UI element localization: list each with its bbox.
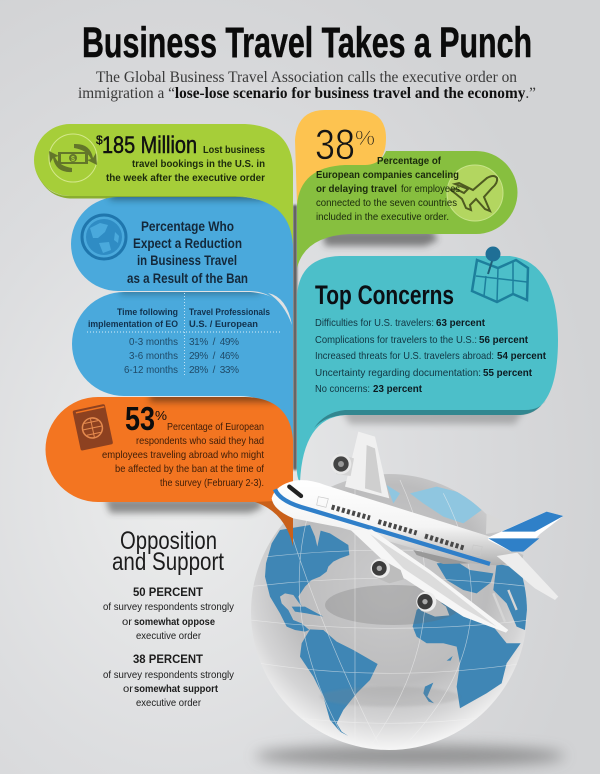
table header — [88, 307, 270, 330]
subtitle: The Global Business Travel Association calls the executive order on — [96, 69, 517, 86]
concerns list — [315, 317, 546, 395]
panel: percentage who expect a reduction — [71, 190, 293, 335]
airplane — [272, 432, 563, 633]
heading: as a Result of the Ban — [127, 271, 248, 286]
text: 53 percent description: Percentage of European — [167, 421, 264, 433]
table rows: 0-3 months — [129, 337, 178, 348]
text: 53 percent description: be affected by the ban at the time of — [115, 463, 264, 475]
panel: 185 million lost bookings — [34, 124, 293, 245]
fuselage — [272, 480, 523, 565]
cockpit window — [289, 487, 301, 496]
panel: reduction table — [72, 286, 293, 440]
text: 38 percent description: included in the executive order. — [316, 211, 449, 223]
text: 185 million: $ — [96, 133, 103, 147]
icon: money transfer — [49, 134, 97, 182]
heading — [127, 219, 248, 286]
text: 53 percent description — [102, 421, 264, 489]
concerns list: No concerns: — [315, 383, 370, 395]
panel: opposition and support: or — [122, 616, 133, 628]
panel: opposition and support: Opposition — [120, 527, 217, 555]
plane shadow on globe — [325, 585, 462, 625]
panel: opposition and support: somewhat oppose — [134, 616, 215, 628]
number: 53 — [125, 400, 155, 437]
center shadow strip — [293, 205, 297, 470]
icon: globe — [82, 215, 126, 259]
concerns list: 23 percent — [373, 383, 422, 395]
number: 38 — [315, 121, 355, 169]
number: % — [155, 408, 167, 423]
panel: opposition and support: and Support — [112, 548, 224, 576]
concerns list: Complications for travelers to the U.S.: — [315, 334, 477, 346]
panel: opposition and support: 50 PERCENT — [133, 585, 204, 599]
text: 53 percent description: respondents who said they had — [136, 435, 264, 447]
heading: Percentage Who — [141, 219, 234, 234]
near engines — [371, 559, 449, 617]
concerns list: 54 percent — [497, 350, 546, 362]
subtitle: immigration a “lose-lose scenario for business travel and the economy.” — [78, 85, 536, 102]
panel: 53 percent — [46, 390, 293, 546]
icon: money transfer: $ — [71, 156, 75, 163]
panel: opposition and support: or — [123, 683, 134, 695]
arctic land — [387, 485, 482, 523]
doors — [317, 497, 482, 556]
concerns list: Increased threats for U.S. travelers abroad: — [315, 350, 494, 362]
far wing and engine — [331, 432, 389, 498]
text: 38 percent description — [316, 155, 460, 223]
concerns list: 63 percent — [436, 317, 485, 329]
blue stripe — [275, 489, 490, 564]
panel: opposition and support: of survey respondents strongly — [103, 669, 235, 681]
graticule — [250, 473, 530, 747]
panel: 38 percent yellow tab — [295, 110, 386, 205]
tail shading — [255, 500, 293, 546]
text: 38 percent description: or delaying travel — [316, 183, 397, 195]
heading: in Business Travel — [137, 253, 237, 268]
panel: opposition and support: of survey respondents strongly — [103, 601, 235, 613]
subtitle — [78, 69, 536, 102]
panel: 38 percent green bubble — [297, 151, 518, 268]
table rows: 3-6 months — [129, 351, 178, 362]
text: 53 percent description: employees traveling abroad who might — [102, 449, 264, 461]
table header: U.S. / European — [189, 319, 258, 330]
underbody shadow — [413, 550, 470, 564]
icon: passport — [72, 404, 113, 451]
tail fin — [488, 512, 563, 552]
heading: Expect a Reduction — [133, 236, 242, 251]
panel: opposition and support: 38 PERCENT — [133, 652, 204, 666]
rear stabilizer far — [486, 513, 500, 534]
table header: implementation of EO — [88, 319, 178, 330]
table rows — [124, 337, 239, 376]
table rows: 28% / 33% — [189, 365, 239, 376]
text: 38 percent description: European companies canceling — [316, 169, 459, 181]
concerns list: 55 percent — [483, 367, 532, 379]
table rows: 29% / 46% — [189, 351, 239, 362]
concerns list: Uncertainty regarding documentation: — [315, 367, 481, 379]
near wing — [351, 529, 508, 633]
text: 38 percent description: connected to the seven countries — [316, 197, 457, 209]
text: 185 million: travel bookings in the U.S. in — [132, 158, 265, 170]
panel: opposition and support: executive order — [136, 630, 201, 642]
panel: opposition and support: somewhat support — [134, 683, 218, 695]
panel: top concerns — [297, 246, 558, 482]
shadow — [117, 292, 262, 298]
text: 53 percent description: the survey (February 2-3). — [160, 477, 264, 489]
table header: Travel Professionals — [189, 307, 270, 318]
text: 185 million: Lost business — [203, 144, 265, 156]
globe — [250, 473, 530, 750]
icon: map with pin — [472, 246, 528, 302]
text: 185 million — [96, 132, 265, 184]
shadow — [146, 397, 275, 406]
text: 38 percent description: for employees — [401, 183, 460, 195]
table rows: 6-12 months — [124, 365, 178, 376]
text: 185 million: 185 Million — [102, 132, 197, 159]
concerns list: Difficulties for U.S. travelers: — [315, 317, 434, 329]
concerns list: 56 percent — [479, 334, 528, 346]
panel: opposition and support: executive order — [136, 697, 201, 709]
text: 38 percent description: Percentage of — [377, 155, 441, 167]
continents — [265, 525, 528, 736]
ground shadow — [255, 745, 565, 767]
windows — [332, 507, 464, 548]
shadow — [106, 197, 266, 204]
panel: opposition and support — [103, 527, 235, 709]
lower globe shading — [320, 687, 460, 707]
heading: Top Concerns — [315, 280, 454, 310]
table rows: 31% / 49% — [189, 337, 239, 348]
text: 185 million: the week after the executive order — [106, 172, 265, 184]
number: % — [355, 127, 375, 150]
table header: Time following — [117, 307, 178, 318]
near stabilizer — [497, 553, 558, 600]
icon: airplane — [447, 165, 503, 221]
